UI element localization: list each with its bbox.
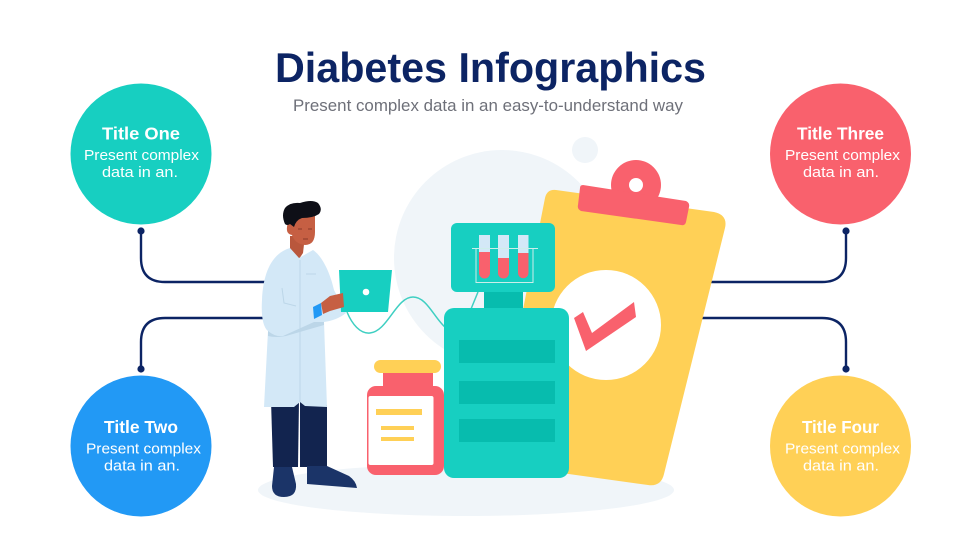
lab coat	[262, 248, 346, 407]
shoes	[272, 466, 357, 497]
circle: title one: data in an.	[102, 165, 178, 181]
circle: title one: Present complex	[84, 148, 200, 164]
machine panels	[459, 340, 555, 442]
circle: title three: data in an.	[803, 165, 879, 181]
testing machine	[444, 223, 569, 478]
cable	[347, 292, 478, 333]
doctor	[262, 201, 392, 497]
circle: title two	[70, 376, 212, 516]
circle: title four	[770, 376, 911, 516]
circle: title four: Title Four	[802, 417, 879, 437]
circle: title two: Present complex	[86, 442, 202, 458]
title: Diabetes Infographics	[275, 44, 706, 91]
head	[283, 201, 321, 245]
hair	[283, 201, 321, 227]
clipboard clip	[578, 160, 689, 225]
check circle	[551, 270, 661, 380]
machine neck	[484, 290, 523, 310]
medicine jar	[367, 360, 444, 475]
connector: title four	[698, 318, 850, 373]
circle: title four: data in an.	[803, 458, 879, 474]
circle: title two: Title Two	[104, 417, 178, 437]
circle: title three: Present complex	[785, 148, 901, 164]
jar label	[368, 396, 434, 465]
background shapes	[258, 137, 674, 516]
connector: title one	[137, 227, 270, 282]
machine body	[444, 308, 569, 478]
circle: title three	[770, 84, 911, 224]
cuff	[313, 303, 322, 319]
circle: title two: data in an.	[104, 458, 180, 474]
connector: title three	[705, 227, 850, 282]
legs	[271, 400, 327, 467]
machine screen	[451, 223, 555, 292]
neck	[290, 236, 305, 259]
clipboard	[518, 160, 726, 485]
circle: title three: Title Three	[797, 124, 884, 144]
hand	[321, 293, 344, 314]
test tubes	[472, 235, 538, 282]
circle: title one	[70, 84, 212, 224]
circle: title one: Title One	[102, 124, 180, 144]
connector: title two	[137, 318, 270, 373]
subtitle: Present complex data in an easy-to-understand way	[293, 97, 684, 115]
tablet	[339, 270, 392, 312]
circle: title four: Present complex	[785, 442, 901, 458]
